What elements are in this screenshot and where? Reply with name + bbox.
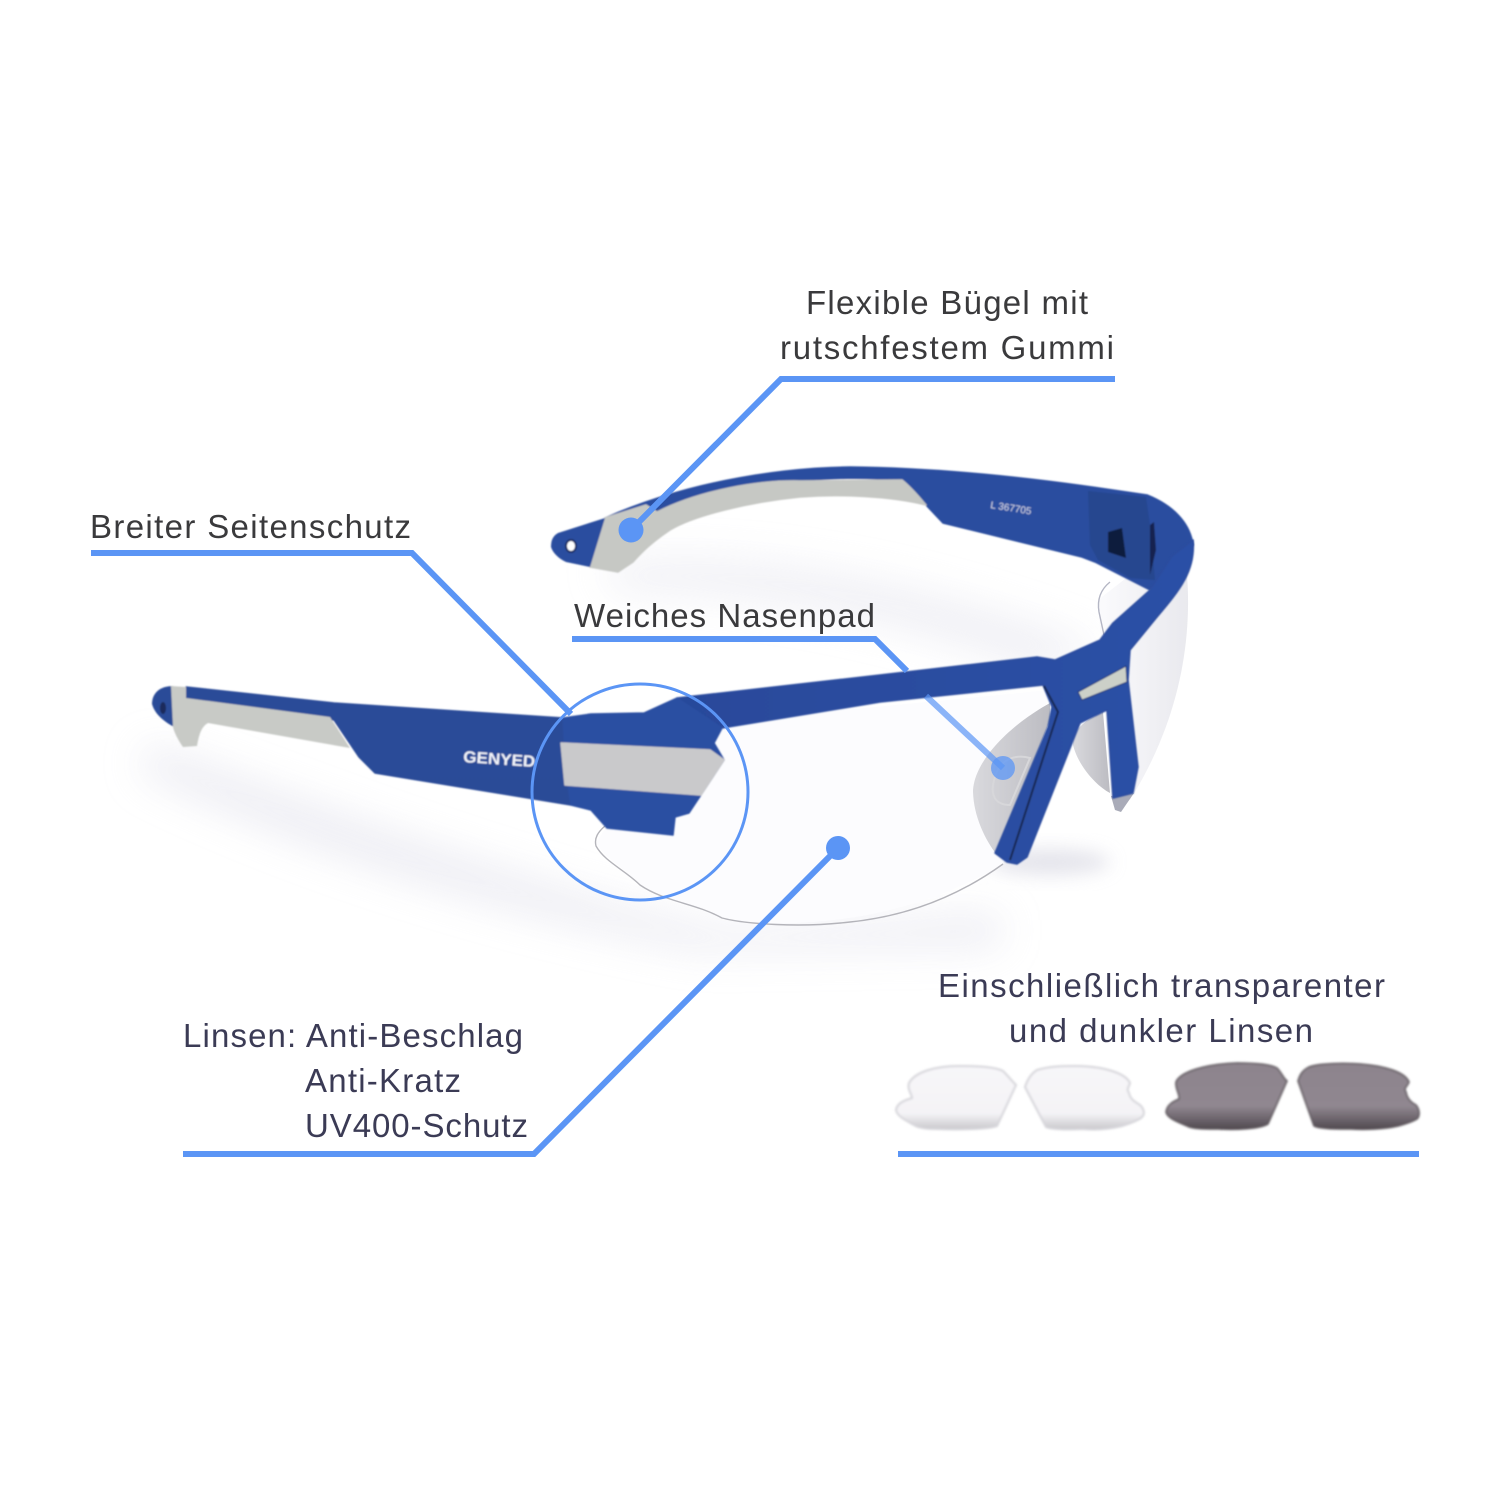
callout: included lenses (896, 967, 1419, 1157)
ear hole (566, 540, 576, 552)
callout heading (780, 284, 1114, 366)
underline (898, 1151, 1419, 1157)
cast shadows (140, 560, 1110, 950)
callout text: UV400-Schutz (305, 1107, 528, 1144)
callout: lens features (183, 836, 850, 1154)
callout heading: Breiter Seitenschutz (90, 508, 411, 545)
hinge opening (1108, 528, 1126, 558)
left lens (596, 690, 1050, 923)
transparent lenses (896, 1066, 1144, 1129)
leader line (91, 553, 571, 714)
front frame (152, 540, 1193, 864)
callout heading: rutschfestem Gummi (780, 329, 1114, 366)
callout heading: Weiches Nasenpad (574, 597, 875, 634)
callout text (938, 967, 1385, 1049)
callout text: Linsen: Anti-Beschlag (183, 1017, 523, 1054)
callout heading: Flexible Bügel mit (806, 284, 1088, 321)
left nose pad (973, 703, 1050, 855)
leader line upper (572, 639, 907, 671)
right nose pad (1073, 712, 1110, 793)
callout: flexible temple (618, 284, 1115, 542)
callout: nose pad (572, 597, 1015, 780)
callout text: und dunkler Linsen (1009, 1012, 1313, 1049)
right lens lower tip (1111, 793, 1134, 812)
left ear tip hole (160, 702, 166, 714)
hinge shadow (1150, 522, 1156, 575)
side shield block (563, 698, 724, 835)
left lens outline (595, 826, 1003, 925)
leader line lower (926, 696, 1003, 768)
callout text (183, 1017, 528, 1144)
back grey grip (590, 480, 926, 572)
leader line (183, 848, 838, 1154)
left temple arm (186, 687, 571, 805)
right lens (1098, 575, 1188, 800)
callout: side protection (90, 508, 748, 900)
temple serial number: L 367705 (990, 500, 1033, 517)
nose pad inner shape (993, 757, 1030, 805)
brand logo: GENYED (463, 749, 536, 771)
nose arm dark edge (1010, 686, 1058, 860)
leader line (631, 379, 1115, 530)
side shield grey insert (561, 743, 724, 795)
hinge block (1088, 491, 1155, 580)
highlight circle (532, 684, 748, 900)
bridge grey insert (1078, 666, 1127, 700)
callout text: Anti-Kratz (305, 1062, 461, 1099)
glasses product illustration (140, 467, 1193, 950)
leader dot (991, 756, 1015, 780)
leader dot (618, 518, 644, 542)
back temple arm (551, 467, 1193, 590)
back ear tip (551, 518, 605, 567)
dark lenses (1166, 1063, 1419, 1129)
right lens edge (1098, 582, 1110, 635)
left ear tip (152, 686, 174, 727)
callout text: Einschließlich transparenter (938, 967, 1385, 1004)
leader dot (826, 836, 850, 860)
left grey grip (171, 686, 350, 748)
